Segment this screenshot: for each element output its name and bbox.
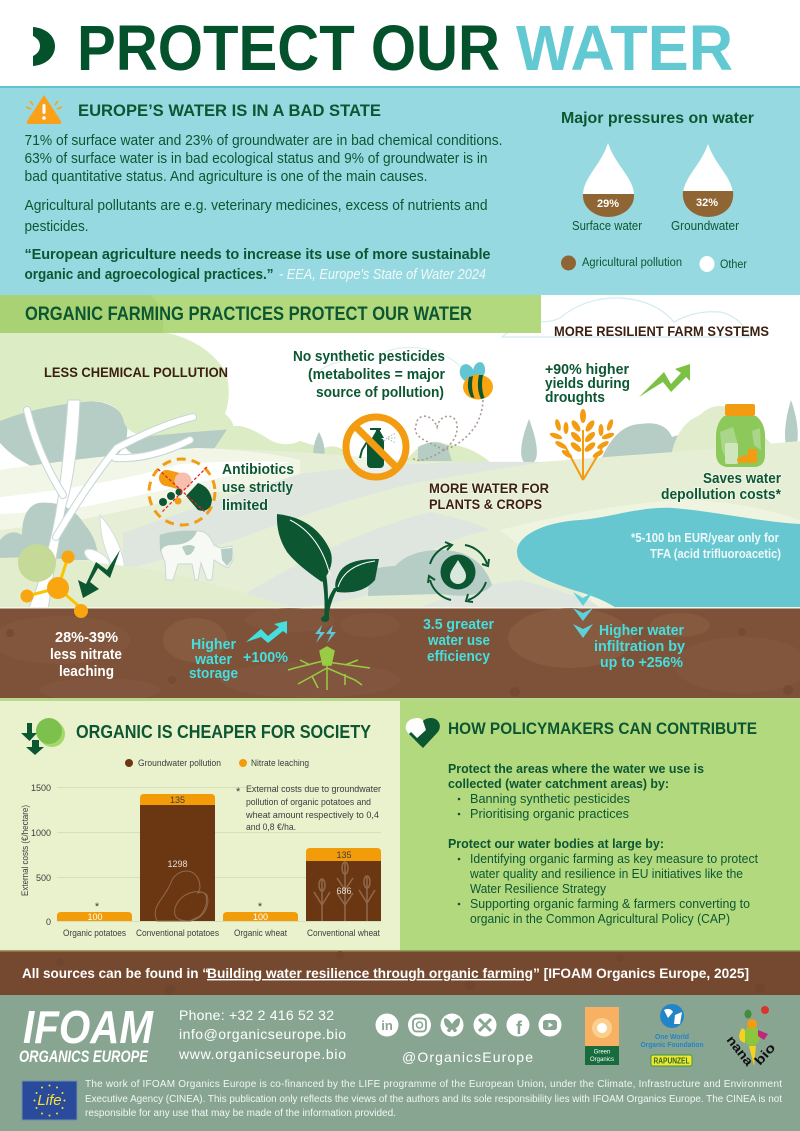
icon: jar of savings [716, 404, 765, 467]
logo: Rapunzel: RAPUNZEL [654, 1056, 690, 1066]
chart: groundwater drop: 32% [696, 197, 718, 209]
text: antibiotics: use strictly [222, 480, 293, 496]
label: more water for plants: PLANTS & CROPS [429, 496, 542, 512]
text: higher infiltration: infiltration by [594, 639, 685, 655]
legend: Agricultural pollution [582, 257, 682, 269]
icon: wheat [549, 409, 615, 480]
text: higher infiltration: up to +256% [600, 655, 683, 671]
soil [0, 607, 800, 702]
text block: protect water bodies: water quality and resilience in EU initiatives like the [469, 867, 743, 881]
icon: crescent [33, 27, 55, 66]
text block: protect catchment areas: collected (water catchment areas) by: [448, 777, 669, 791]
logo: Rapunzel [651, 1055, 692, 1066]
icon: warning triangle [26, 95, 62, 124]
chart footnote: and 0,8 €/ha. [246, 822, 296, 833]
text block: funding notice: Executive Agency (CINEA). This publication only reflects the views of the authors and its sole responsibility lies with IFOAM Organics Europe. The CINEA is not [85, 1094, 782, 1105]
panel: how policymakers can contribute [400, 701, 800, 950]
text: saves depollution costs: Saves water [703, 471, 781, 487]
x-axis labels: Conventional potatoes [136, 928, 219, 938]
contact details: info@organicseurope.bio [179, 1026, 346, 1042]
icon: bluesky [440, 1014, 464, 1036]
bar: organic wheat: * [258, 901, 263, 913]
sources band: Building water resilience through organic farming [207, 965, 533, 981]
cypress trees [313, 400, 798, 464]
text: water use efficiency [423, 617, 494, 665]
banner heading: ORGANIC FARMING PRACTICES PROTECT OUR WATER [25, 304, 472, 325]
icon: infiltration chevrons [573, 592, 593, 638]
text block: protect water bodies: Water Resilience Strategy [470, 882, 607, 896]
label: more resilient farm systems: MORE RESILIENT FARM SYSTEMS [554, 323, 769, 339]
text block: statistics: bad quantitative status. And agriculture is one of the main causes. [24, 169, 428, 185]
sources band: All sources can be found in “ [22, 965, 209, 981]
text: less nitrate leaching: less nitrate [50, 647, 122, 663]
text: higher infiltration: Higher water [599, 623, 684, 639]
text: less nitrate leaching: leaching [59, 664, 114, 680]
text: no synthetic pesticides: source of pollution) [316, 384, 444, 401]
bar: conventional potatoes [140, 794, 215, 921]
bar: organic wheat: 100 [253, 912, 268, 922]
contact details [178, 1007, 346, 1062]
panel: organic farming landscape [0, 295, 800, 702]
legend: Other [720, 259, 747, 271]
text: saves depollution costs: depollution costs* [661, 487, 781, 503]
chart legend: Nitrate leaching [251, 758, 309, 768]
chart footnote: pollution of organic potatoes and [246, 797, 371, 808]
title: WATER [516, 12, 733, 84]
text: antibiotics [222, 462, 294, 514]
bar: conventional wheat: 686 [336, 886, 352, 896]
text: water use efficiency: 3.5 greater [423, 617, 494, 633]
logo: Green Organics [585, 1007, 619, 1065]
icon: nitrate molecule [18, 544, 88, 618]
bar chart: 500 [36, 873, 51, 883]
sources band: ” [IFOAM Organics Europe, 2025] [533, 965, 749, 981]
x-axis labels: Organic wheat [234, 928, 287, 938]
legend [561, 256, 747, 272]
seedling [277, 514, 379, 690]
text: higher yields: yields during [545, 376, 630, 392]
bar chart: 1000 [31, 828, 51, 838]
bar: conventional wheat: 135 [336, 850, 352, 860]
chart: groundwater drop [671, 144, 739, 233]
social icons [376, 1014, 562, 1038]
chart footnote: * [236, 786, 241, 798]
quote: organic and agroecological practices.” [24, 267, 274, 283]
text block: statistics [24, 133, 502, 235]
icon: instagram [408, 1014, 431, 1036]
bar chart [20, 783, 381, 938]
fields [0, 441, 800, 608]
chart: surface water drop: 29% [597, 198, 619, 210]
icon: X [474, 1014, 496, 1036]
logo: EU LIFE flag: Life [37, 1092, 62, 1109]
footer [0, 995, 800, 1131]
icon: water bolts [315, 625, 336, 643]
arrow: yields up [639, 364, 690, 397]
text block: protect catchment areas [448, 762, 704, 821]
text block: statistics: Agricultural pollutants are e.g. veterinary medicines, excess of nutrients and [24, 198, 488, 214]
panel: Europe's water state [0, 86, 800, 295]
text block: funding notice: responsible for any use that may be made of the information provided. [85, 1108, 396, 1119]
title [33, 12, 733, 84]
icon: handshake heart [406, 718, 440, 748]
quote: “European agriculture needs to increase its use of more sustainable [24, 247, 490, 263]
arrow: nitrate down [78, 550, 120, 598]
text: higher water storage: storage [189, 666, 238, 682]
text block: funding notice [85, 1079, 782, 1119]
text: higher water storage [189, 637, 288, 682]
icon: facebook [506, 1014, 530, 1038]
text: higher water storage: +100% [243, 650, 288, 666]
text: no synthetic pesticides [293, 348, 445, 401]
chart legend: Groundwater pollution [138, 758, 221, 768]
bar: conventional wheat [306, 848, 381, 921]
x-axis labels: Organic potatoes [63, 928, 126, 938]
logo: nana bio: nana [724, 1033, 757, 1069]
text: higher yields: +90% higher [545, 362, 629, 378]
distant hills [200, 426, 330, 470]
chart footnote: wheat amount respectively to 0,4 [245, 810, 379, 821]
text block: protect catchment areas: Banning synthetic pesticides [470, 792, 630, 806]
chart heading: Major pressures on water [561, 110, 754, 127]
text: higher yields: droughts [545, 390, 605, 406]
bar chart: 1500 [31, 783, 51, 793]
chart footnote: External costs due to groundwater [246, 784, 381, 795]
text block: protect water bodies [448, 837, 759, 926]
social handle: @OrganicsEurope [402, 1049, 533, 1065]
logo: One World Organic Foundation [640, 1004, 704, 1049]
text block: protect water bodies: organic in the Common Agricultural Policy (CAP) [470, 912, 730, 926]
text block: protect water bodies: Supporting organic farming & farmers converting to [470, 897, 750, 911]
logo: IFOAM Organics Europe: IFOAM [23, 1001, 154, 1053]
tree canopy grey [0, 401, 127, 473]
chart footnote [236, 784, 381, 833]
text: TFA note: TFA (acid trifluoroacetic) [650, 547, 781, 561]
lake [517, 508, 800, 617]
chart: groundwater drop: Groundwater [671, 219, 739, 233]
text: no synthetic pesticides: No synthetic pesticides [293, 348, 445, 365]
x-axis labels: Conventional wheat [307, 928, 380, 938]
logo: nana bio: bio [751, 1040, 778, 1068]
roots [288, 647, 370, 690]
text block: statistics: 71% of surface water and 23% of groundwater are in bad chemical conditions. [24, 133, 502, 149]
text: higher infiltration [594, 623, 685, 671]
icon: coins and arrows [21, 718, 65, 755]
heading: EUROPE’S WATER IS IN A BAD STATE [78, 101, 381, 120]
x-axis labels [63, 928, 380, 938]
bar chart: External costs (€/hectare) [20, 805, 30, 896]
bar: organic potatoes: * [95, 901, 100, 913]
logo: IFOAM Organics Europe: ORGANICS EUROPE [19, 1047, 149, 1066]
grey bush behind recycling icon [368, 550, 492, 596]
arrow: storage up [246, 621, 287, 643]
bar: organic potatoes: 100 [87, 912, 103, 922]
icon: no pesticide sprayer [346, 417, 406, 477]
label: more water for plants: MORE WATER FOR [429, 480, 549, 496]
bar chart: 0 [46, 917, 51, 927]
bar: conventional potatoes: 135 [170, 795, 185, 805]
text block: statistics: 63% of surface water is in bad ecological status and 9% of groundwater is in [24, 151, 488, 167]
logo: One World Organic Foundation: One World [655, 1032, 689, 1041]
text: TFA note: *5-100 bn EUR/year only for [631, 531, 779, 545]
icon: bee [413, 361, 493, 460]
chart: surface water drop [572, 143, 642, 233]
text block: protect catchment areas: Prioritising organic practices [470, 807, 629, 821]
chart: surface water drop: Surface water [572, 219, 642, 233]
text block: protect water bodies: Identifying organic farming as key measure to protect [470, 852, 759, 866]
tree canopy light [0, 295, 234, 436]
label: more water for plants [429, 480, 549, 512]
label: less chemical pollution: LESS CHEMICAL POLLUTION [44, 364, 228, 380]
icon: youtube [538, 1014, 562, 1036]
icon: no antibiotics [149, 459, 215, 525]
quote: - EEA, Europe's State of Water 2024 [279, 267, 486, 283]
icon: water cycle [428, 542, 489, 602]
bar: conventional potatoes: 1298 [167, 859, 188, 869]
icon: cow [160, 531, 233, 580]
text block: funding notice: The work of IFOAM Organics Europe is co-financed by the LIFE programme of the European Union, under the Climate, Infrastructure and Environment [85, 1079, 782, 1090]
contact details: www.organicseurope.bio [178, 1046, 346, 1062]
logo: Green Organics: Green [594, 1050, 610, 1056]
logo: EU LIFE flag [22, 1081, 77, 1120]
heading: HOW POLICYMAKERS CAN CONTRIBUTE [448, 719, 757, 738]
text: higher water storage: Higher [191, 637, 236, 653]
text: higher water storage: water [194, 652, 232, 668]
title: PROTECT OUR [77, 12, 500, 84]
icon: facebook: f [516, 1018, 523, 1038]
quote [24, 247, 490, 283]
text block: protect water bodies: Protect our water bodies at large by: [448, 837, 664, 851]
panel: organic is cheaper [0, 701, 400, 950]
logo: Green Organics: Organics [590, 1057, 614, 1063]
foreground hill [0, 558, 292, 608]
chart legend [125, 758, 309, 768]
text: no synthetic pesticides: (metabolites = major [308, 366, 445, 383]
bush at tree foot [0, 503, 98, 560]
contact details: Phone: +32 2 416 52 32 [179, 1007, 334, 1023]
icon: linkedin [376, 1014, 398, 1036]
bar: organic wheat [223, 901, 298, 922]
tree trunk [27, 400, 193, 610]
text: TFA note [631, 531, 781, 561]
logo: One World Organic Foundation: Organic Foundation [640, 1040, 704, 1049]
clouds [502, 298, 750, 337]
text block: statistics: pesticides. [24, 219, 88, 235]
text: less nitrate leaching [50, 630, 122, 680]
text block: protect catchment areas: Protect the areas where the water we use is [448, 762, 704, 776]
text: antibiotics: Antibiotics [222, 462, 294, 478]
text: water use efficiency: water use [427, 633, 490, 649]
text: saves depollution costs [661, 471, 781, 503]
text: higher yields [545, 362, 630, 406]
logo: nana bio [724, 1006, 778, 1069]
text: antibiotics: limited [222, 498, 268, 514]
sources band [0, 950, 800, 995]
text: less nitrate leaching: 28%-39% [55, 630, 118, 646]
icon: linkedin: in [381, 1018, 393, 1033]
text: water use efficiency: efficiency [427, 649, 490, 665]
bar: organic potatoes [57, 901, 132, 922]
heading: ORGANIC IS CHEAPER FOR SOCIETY [76, 722, 371, 742]
banner heading [0, 295, 541, 333]
